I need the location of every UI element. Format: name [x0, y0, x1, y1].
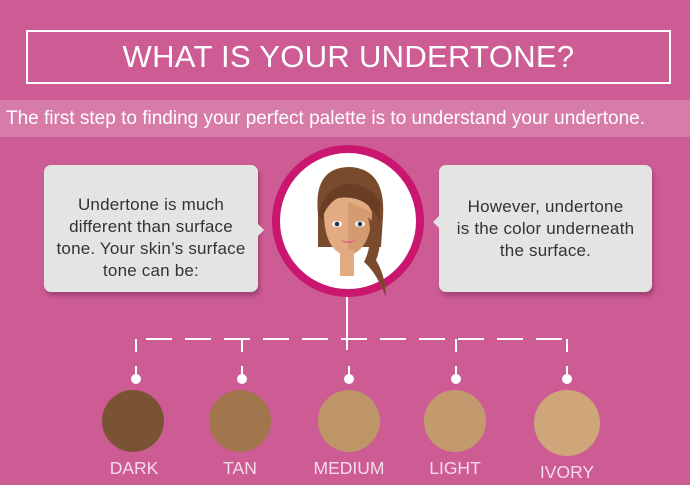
swatch: medium	[318, 390, 380, 452]
label: light: LIGHT	[429, 458, 481, 478]
callout: left: different than surface	[69, 217, 233, 236]
subtitle band	[0, 100, 690, 137]
label: dark: DARK	[110, 458, 158, 478]
subtitle band: The first step to finding your perfect palette is to understand your undertone.	[6, 108, 645, 129]
portrait icon	[272, 145, 424, 297]
label: ivory: IVORY	[540, 462, 594, 482]
swatch: dark	[102, 390, 164, 452]
callout: left: tone can be:	[103, 261, 199, 280]
callout: right: However, undertone	[468, 197, 623, 216]
callout: left: tone. Your skin’s surface	[56, 239, 245, 258]
callout: right: the surface.	[500, 241, 591, 260]
callout: left	[44, 165, 258, 292]
label: medium: MEDIUM	[314, 458, 384, 478]
title	[26, 30, 671, 84]
swatch: light	[424, 390, 486, 452]
title: WHAT IS YOUR UNDERTONE?	[123, 39, 574, 74]
callout: right	[439, 165, 652, 292]
callout: left: Undertone is much	[78, 195, 224, 214]
callout: right: is the color underneath	[457, 219, 634, 238]
swatch: tan	[209, 390, 271, 452]
swatch: ivory	[534, 390, 600, 456]
label: tan: TAN	[223, 458, 257, 478]
